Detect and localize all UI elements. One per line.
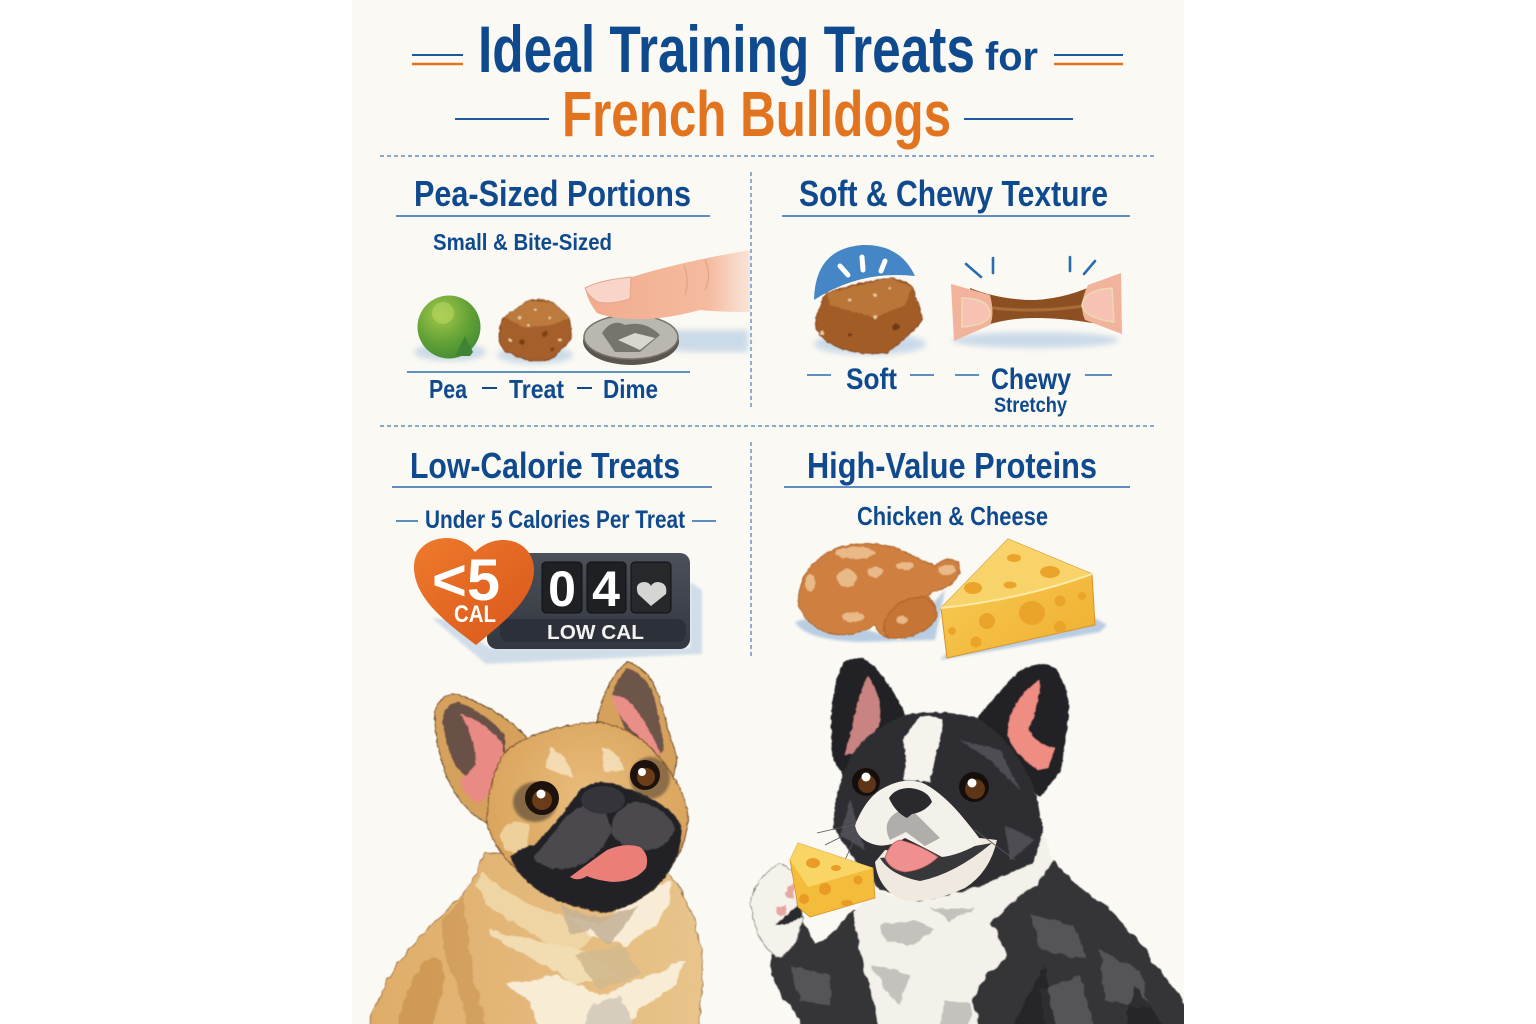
icon: cheese wedge [941,539,1095,658]
right ear [977,664,1069,797]
dog: fawn french bulldog [360,662,703,1024]
nose [889,788,932,818]
labels: pea, treat, dime [429,374,658,404]
icon: blue press dome [814,245,915,300]
held cheese [790,843,875,917]
title: French Bulldogs [562,78,951,150]
white blaze [903,716,943,782]
lower jaw [875,838,997,901]
panel: pea-sized portions [396,173,750,404]
icon: pea [418,296,480,358]
shadows [814,332,1119,355]
panel: soft and chewy texture [782,173,1130,417]
paw [750,863,803,957]
black body and fur [770,833,1200,1024]
heading: soft and chewy texture: Soft & Chewy Texture [799,173,1108,214]
labels: soft, chewy, stretchy: Stretchy [994,394,1067,417]
whiskers [817,824,1015,860]
labels: soft, chewy, stretchy [807,363,1112,417]
icon: calorie heart: CAL [454,601,496,628]
icon: calorie heart [414,538,534,645]
dog: black and white french bulldog [750,658,1200,1024]
shadows [414,330,748,364]
fawn muzzle and mouth [510,782,682,912]
heading: low-calorie treats: Low-Calorie Treats [410,445,680,486]
head [833,712,1043,900]
infographic [352,0,1184,1024]
heading: high-value proteins: High-Value Proteins [807,445,1097,486]
white muzzle [855,781,982,857]
counter panel: 0 [548,561,576,617]
subheading: chicken and cheese: Chicken & Cheese [857,501,1048,531]
fawn head [487,722,688,912]
icon: chewy stretch [951,257,1122,341]
eyes [852,768,989,802]
title: for [985,35,1038,79]
labels: soft, chewy, stretchy: Soft [846,363,897,396]
left ear [831,658,905,785]
section dividers [380,156,1156,657]
panel: low-calorie treats [392,445,716,664]
icon: dime [583,315,679,365]
title: Ideal Training Treats [478,12,975,86]
labels: pea, treat, dime: Dime [603,374,658,404]
icon: soft treat [815,278,923,353]
fawn tongue [570,845,647,882]
shadow [432,582,702,664]
title [412,12,1123,150]
shadows [795,590,1107,660]
labels: pea, treat, dime: Treat [509,374,564,404]
icon: calorie heart: <5 [432,548,500,613]
panel: high-value proteins [784,445,1130,660]
labels: soft, chewy, stretchy: Chewy [991,363,1071,396]
counter panel: 4 [592,561,620,617]
fawn left ear [435,694,527,823]
fawn right ear [597,662,677,785]
fawn body and fur [360,853,703,1024]
counter panel: LOW CAL [547,622,644,644]
subheading: under 5 calories per treat: Under 5 Calories Per Treat [425,506,686,534]
icon: treat [499,300,571,361]
icon: chicken [798,543,960,638]
fawn eyes [513,757,670,822]
heading: pea-sized portions: Pea-Sized Portions [414,173,691,214]
labels: pea, treat, dime: Pea [429,374,467,404]
subheading: small and bite-sized: Small & Bite-Sized [433,229,612,255]
tongue [885,840,938,872]
fawn nose [581,786,625,814]
counter panel [487,553,690,649]
icon: finger [585,250,750,319]
paper background [352,0,1184,1024]
